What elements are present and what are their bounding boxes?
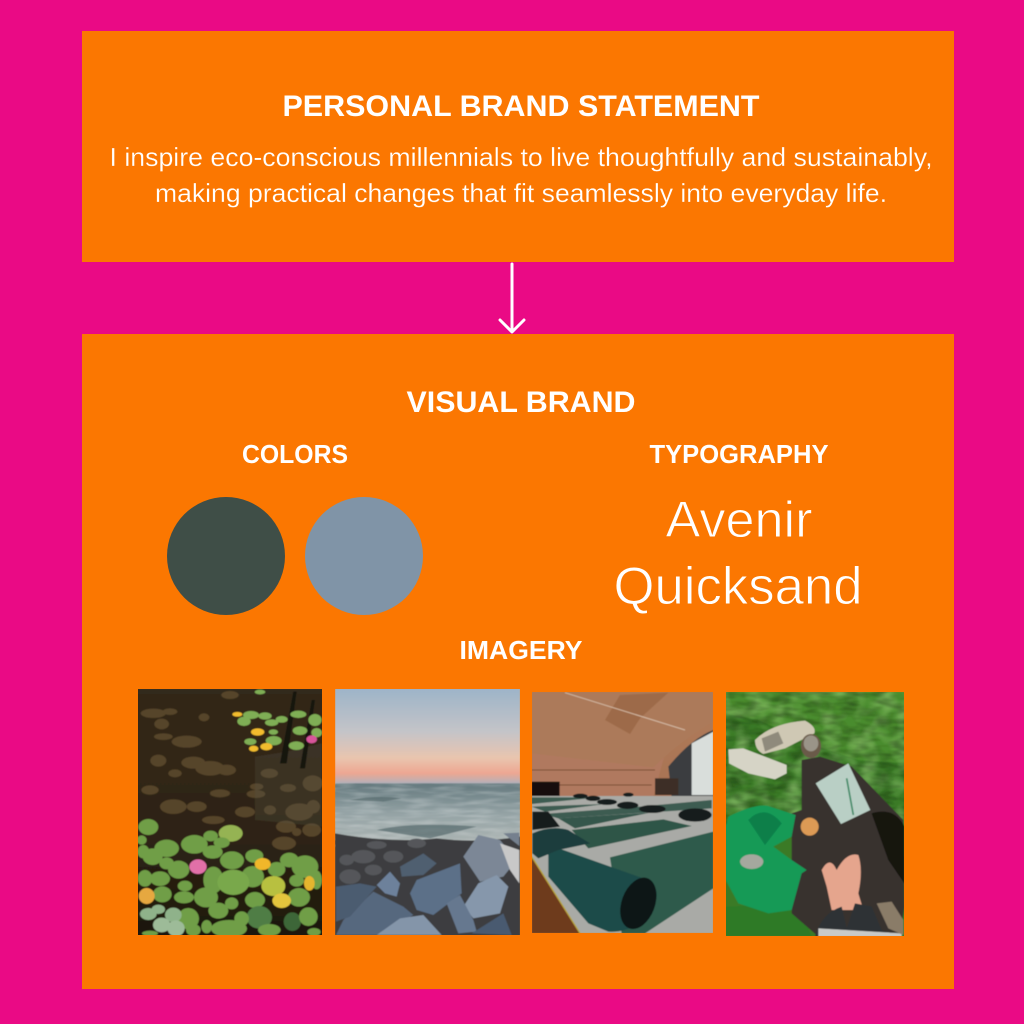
heading: colors: COLORS — [242, 439, 348, 469]
panel: visual brand — [82, 334, 954, 989]
colour swatch: blue grey — [305, 497, 423, 615]
photo: grass with shoes, notebook, green bag and feet — [725, 692, 905, 937]
font sample: Avenir: Avenir — [666, 491, 813, 548]
text: statement body: I inspire eco-conscious millennials to live thoughtfully and sustainably, — [110, 142, 933, 172]
colour swatch: dark green — [167, 497, 285, 615]
text: statement body — [110, 142, 933, 208]
heading: imagery: IMAGERY — [460, 635, 582, 665]
text: statement body: making practical changes that fit seamlessly into everyday life. — [155, 178, 887, 208]
font sample: Quicksand: Quicksand — [614, 557, 862, 616]
arrow: statement to visual brand — [500, 264, 524, 332]
heading: typography: TYPOGRAPHY — [650, 439, 828, 469]
heading: personal brand statement: PERSONAL BRAND STATEMENT — [282, 90, 760, 123]
photo: yoga studio with mats — [532, 692, 713, 934]
panel: personal brand statement — [82, 31, 954, 262]
photo: lily pond — [137, 688, 323, 937]
heading: visual brand: VISUAL BRAND — [406, 386, 636, 419]
photo: sea at sunset with rocks — [335, 688, 520, 937]
